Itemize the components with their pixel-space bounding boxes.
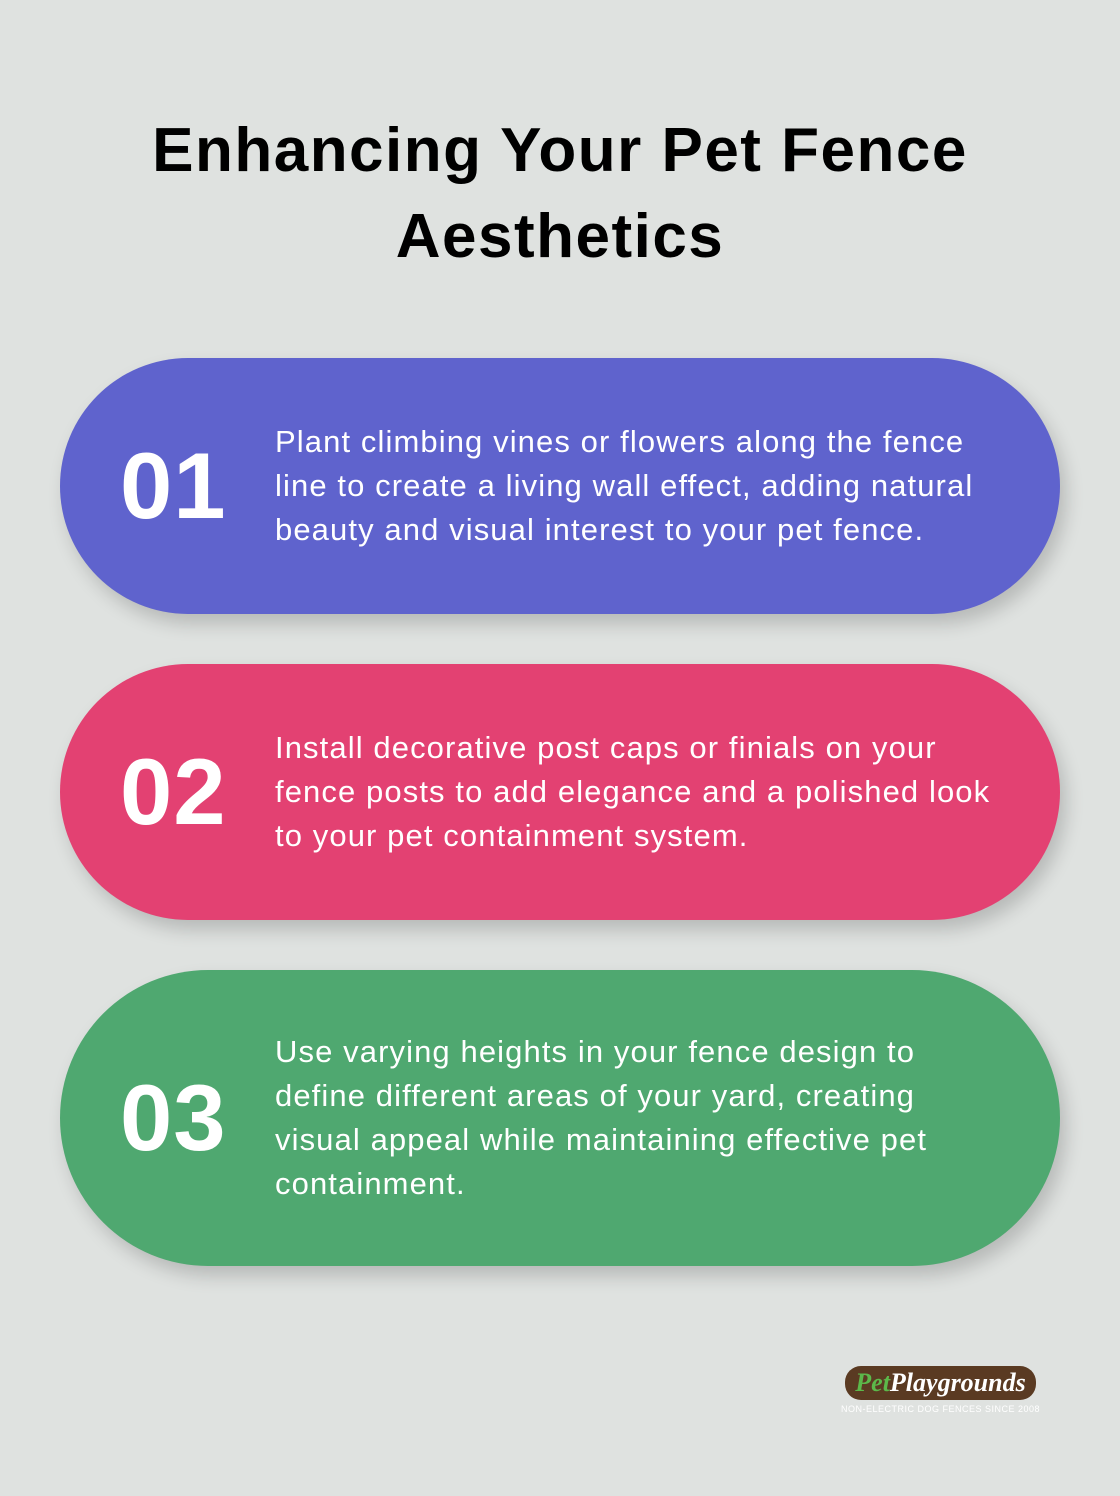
text 2: fence posts to add elegance and a polished look <box>275 774 990 809</box>
card 1 <box>60 358 1060 614</box>
logo: NON-ELECTRIC DOG FENCES SINCE 2008 <box>841 1404 1040 1414</box>
number 01: 01 <box>120 433 227 538</box>
card 3 <box>60 970 1060 1266</box>
number 03: 03 <box>120 1065 227 1170</box>
text 3: visual appeal while maintaining effective pet <box>275 1122 927 1157</box>
text 1 <box>275 424 973 547</box>
logo: PetPlaygrounds <box>855 1368 1026 1397</box>
title: Enhancing Your Pet Fence <box>152 116 968 185</box>
text 2: Install decorative post caps or finials on your <box>275 730 937 765</box>
title: Aesthetics <box>396 202 724 271</box>
title <box>152 116 968 271</box>
text 3 <box>275 1034 927 1201</box>
text 2: to your pet containment system. <box>275 818 748 853</box>
text 1: beauty and visual interest to your pet fence. <box>275 512 924 547</box>
logo <box>841 1366 1040 1414</box>
text 1: line to create a living wall effect, adding natural <box>275 468 973 503</box>
text 2 <box>275 730 990 853</box>
text 1: Plant climbing vines or flowers along the fence <box>275 424 964 459</box>
text 3: define different areas of your yard, creating <box>275 1078 915 1113</box>
number 02: 02 <box>120 739 227 844</box>
card 2 <box>60 664 1060 920</box>
text 3: containment. <box>275 1166 466 1201</box>
text 3: Use varying heights in your fence design to <box>275 1034 915 1069</box>
